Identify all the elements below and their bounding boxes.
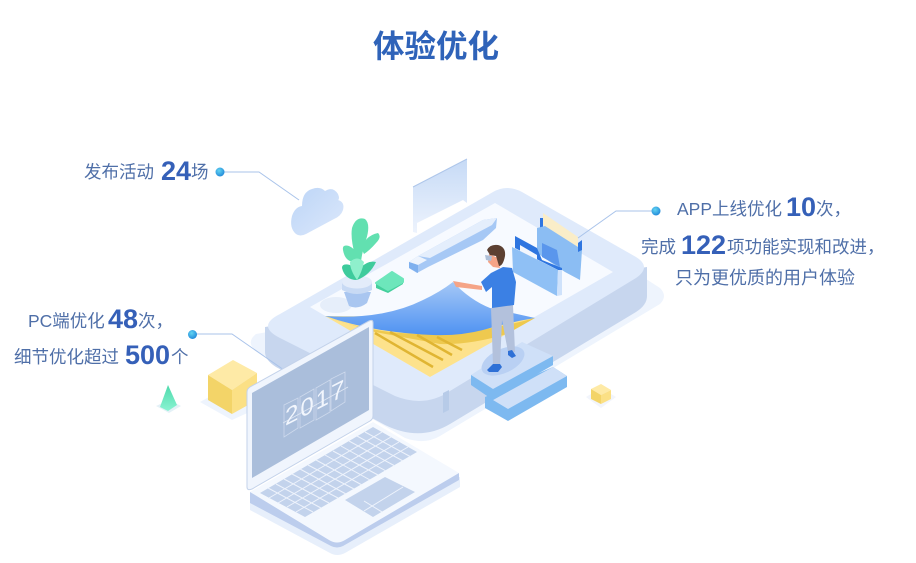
whiteboard xyxy=(413,159,467,233)
callout: PC optimisation: 500 xyxy=(125,340,170,370)
callout: APP optimisation: 次， xyxy=(816,199,851,219)
folders xyxy=(512,213,582,296)
callout: PC optimisation: PC端优化 xyxy=(28,311,105,331)
pen xyxy=(409,218,497,273)
laptop lid xyxy=(247,320,373,490)
callout: events: 发布活动 xyxy=(84,162,154,182)
green pad xyxy=(376,272,403,293)
callout: APP optimisation: 122 xyxy=(681,230,726,260)
keyboard xyxy=(260,427,417,517)
cloud xyxy=(291,188,343,236)
yellow document xyxy=(325,316,535,377)
callout: APP optimisation: 项功能实现和改进， xyxy=(727,237,884,257)
trackpad xyxy=(345,477,415,517)
callout: APP optimisation: 10 xyxy=(786,192,816,222)
callout: APP optimisation xyxy=(578,192,884,288)
blue peeled sheet xyxy=(325,282,535,335)
callout: PC optimisation: 次， xyxy=(138,311,173,331)
phone body xyxy=(265,188,647,433)
large yellow cube xyxy=(200,360,280,420)
small yellow cube xyxy=(586,384,616,408)
callout: APP optimisation: 完成 xyxy=(641,237,676,257)
callout: APP optimisation: APP上线优化 xyxy=(677,199,782,219)
callout: PC optimisation: 个 xyxy=(171,347,188,367)
title: 体验优化 xyxy=(373,28,499,64)
green pyramid xyxy=(156,385,181,413)
callout: APP optimisation: 只为更优质的用户体验 xyxy=(675,268,855,288)
laptop xyxy=(247,320,460,555)
callout: PC optimisation xyxy=(14,304,284,370)
callout: PC optimisation: 48 xyxy=(108,304,138,334)
callout: PC optimisation: 细节优化超过 xyxy=(14,347,119,367)
steps xyxy=(471,342,567,421)
laptop calendar 2017: 2017 xyxy=(285,374,346,432)
callout: events: 场 xyxy=(191,162,208,182)
callout: events xyxy=(84,156,299,200)
person xyxy=(453,245,529,382)
phone base shadow xyxy=(251,270,664,441)
plant xyxy=(320,218,380,313)
callout: events: 24 xyxy=(161,156,191,186)
